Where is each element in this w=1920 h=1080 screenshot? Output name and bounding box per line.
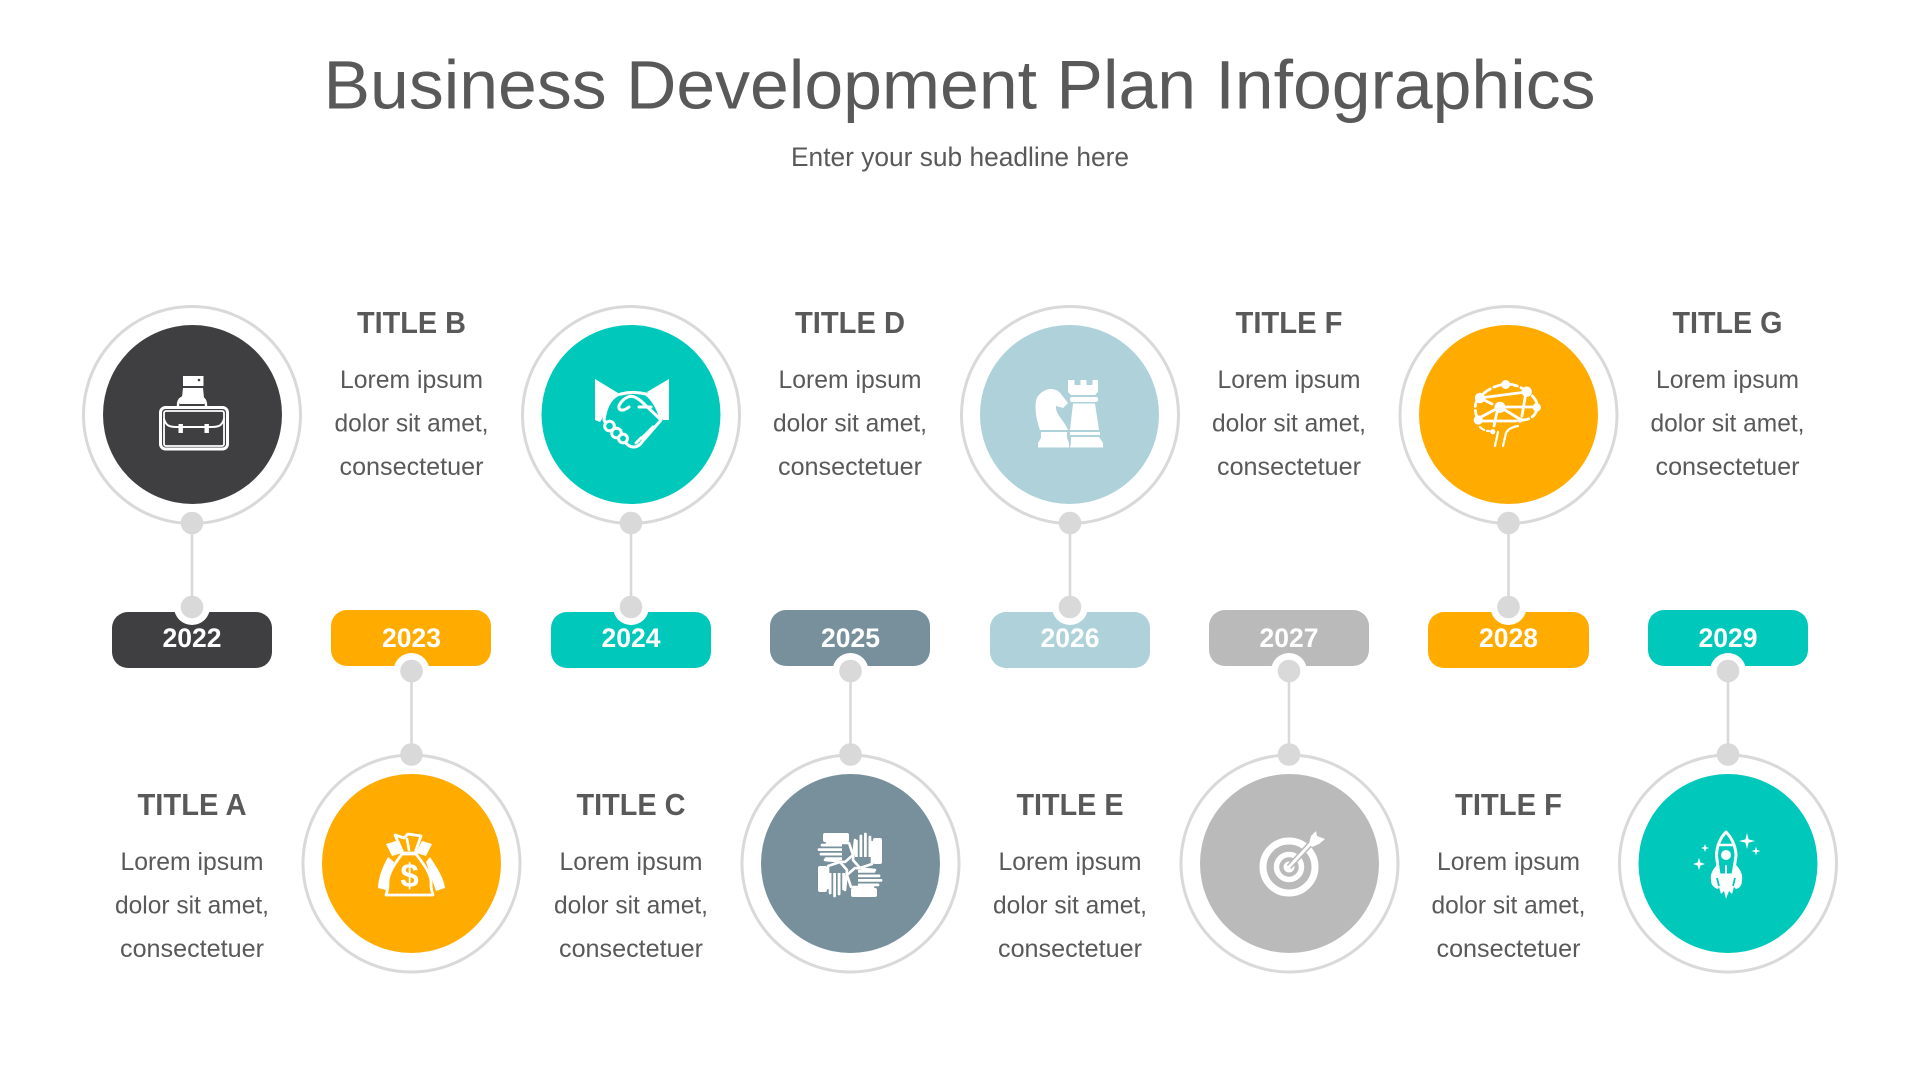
year 2023: 2023 (382, 623, 441, 653)
text block: title E (993, 787, 1147, 963)
dot top 2028 (1497, 512, 1520, 534)
text block: title D: consectetuer (778, 453, 922, 481)
connector 2029 (1727, 671, 1729, 754)
text block: title G: Lorem ipsum (1656, 366, 1799, 394)
pill 2023 (331, 610, 491, 666)
dot top 2029 (1717, 660, 1739, 682)
text block: title A: consectetuer (120, 935, 264, 963)
pill 2022 (112, 612, 272, 668)
connector 2022 (191, 523, 193, 607)
text block: title C: dolor sit amet, (554, 892, 708, 920)
icon: chess knight and rook (1036, 380, 1103, 448)
pill notch 2022 (174, 589, 210, 625)
year 2025: 2025 (821, 623, 880, 653)
connector 2027 (1288, 671, 1290, 754)
connector 2026 (1069, 523, 1071, 607)
step 2026: title E (962, 305, 1366, 668)
dot bottom 2027 (1278, 743, 1300, 766)
text block: title G (1650, 305, 1804, 481)
text block: title C: consectetuer (559, 935, 703, 963)
pill 2027 (1209, 610, 1369, 666)
text block: title B: dolor sit amet, (334, 410, 488, 438)
dot top 2027 (1278, 660, 1300, 682)
text block: title F: Lorem ipsum (1218, 366, 1360, 394)
pill 2025 (770, 610, 930, 666)
text block: title G: TITLE G (1672, 305, 1782, 340)
step 2029: title F (second) (1432, 610, 1836, 972)
pill 2029 (1648, 610, 1808, 666)
text block: title F second: TITLE F (1455, 787, 1562, 822)
circle 2023 (303, 755, 520, 972)
pill 2024 (551, 612, 711, 668)
text block: title E: consectetuer (998, 935, 1142, 963)
circle 2025 (742, 755, 959, 972)
connector 2025 (849, 671, 852, 754)
text block: title F second (1432, 787, 1586, 963)
dollar sign: $ (400, 857, 419, 894)
text block: title B (334, 305, 488, 481)
pill notch 2024 (613, 589, 649, 625)
connector 2023 (410, 671, 413, 754)
year 2027: 2027 (1260, 623, 1318, 653)
text block: title C (554, 787, 708, 963)
dot bottom 2022 (181, 596, 203, 618)
text block: title D: TITLE D (795, 305, 905, 340)
pill notch 2026 (1052, 589, 1088, 625)
circle 2029 (1620, 755, 1836, 972)
circle 2022 (84, 306, 300, 524)
text block: title F second: dolor sit amet, (1432, 892, 1586, 920)
text block: title F: dolor sit amet, (1212, 410, 1366, 438)
text block: title D (773, 305, 927, 481)
text block: title E: Lorem ipsum (998, 848, 1142, 876)
text block: title A (115, 787, 269, 963)
text block: title G: consectetuer (1656, 453, 1800, 481)
text block: title F: consectetuer (1217, 453, 1361, 481)
dot bottom 2026 (1059, 596, 1081, 618)
icon: brain network (1474, 380, 1541, 446)
dot top 2024 (620, 512, 642, 534)
year 2028: 2028 (1479, 623, 1538, 653)
text block: title C: Lorem ipsum (560, 848, 702, 876)
step 2025: title D (554, 610, 959, 972)
text block: title B: TITLE B (357, 305, 466, 340)
connector 2024 (630, 523, 632, 607)
dot top 2026 (1059, 512, 1081, 534)
text block: title E: dolor sit amet, (993, 892, 1147, 920)
icon: target with arrow (1263, 831, 1325, 893)
text block: title B: consectetuer (340, 453, 484, 481)
year 2024: 2024 (602, 623, 660, 653)
icon: money bag (378, 834, 445, 895)
pill notch 2025 (832, 653, 868, 689)
title: Business Development Plan Infographics (324, 46, 1596, 124)
icon: briefcase in hand (160, 376, 228, 449)
text block: title A: Lorem ipsum (120, 848, 264, 876)
text block: title F second: Lorem ipsum (1437, 848, 1580, 876)
dot bottom 2023 (400, 743, 423, 766)
text block: title D: Lorem ipsum (778, 366, 922, 394)
pill 2028 (1428, 612, 1589, 668)
circle 2027 (1181, 755, 1398, 972)
pill 2026 (990, 612, 1150, 668)
text block: title C: TITLE C (576, 787, 686, 822)
dot top 2022 (181, 512, 203, 534)
text block: title A: TITLE A (138, 787, 246, 822)
text block: title E: TITLE E (1016, 787, 1124, 822)
text block: title A: dolor sit amet, (115, 892, 269, 920)
step 2028: title G (1400, 305, 1804, 668)
pill notch 2028 (1490, 589, 1526, 625)
text block: title F (1212, 305, 1366, 481)
pill notch 2023 (394, 653, 430, 689)
step 2024: title C (522, 305, 927, 668)
circle 2028 (1400, 306, 1617, 524)
icon: handshake (595, 379, 669, 447)
icon: rocket with stars (1693, 832, 1760, 899)
dot bottom 2024 (620, 596, 642, 618)
step 2027: title F (993, 610, 1398, 972)
dot bottom 2028 (1497, 596, 1520, 618)
subtitle: Enter your sub headline here (791, 142, 1129, 172)
text block: title D: dolor sit amet, (773, 410, 927, 438)
dot top 2025 (839, 660, 862, 682)
year 2026: 2026 (1040, 623, 1100, 653)
year 2022: 2022 (162, 623, 222, 653)
dot top 2023 (400, 660, 423, 682)
year 2029: 2029 (1698, 623, 1758, 653)
dot bottom 2025 (839, 743, 862, 766)
text block: title B: Lorem ipsum (340, 366, 483, 394)
icon: four hands (818, 833, 882, 897)
text block: title G: dolor sit amet, (1650, 410, 1804, 438)
pill notch 2029 (1710, 653, 1746, 689)
pill notch 2027 (1271, 653, 1307, 689)
connector 2028 (1507, 523, 1510, 607)
circle 2026 (962, 306, 1178, 524)
circle 2024 (522, 306, 740, 524)
dot bottom 2029 (1717, 743, 1739, 766)
step 2023: title B (115, 610, 520, 972)
text block: title F second: consectetuer (1436, 935, 1580, 963)
step 2022: title A (84, 305, 488, 668)
text block: title F: TITLE F (1236, 305, 1342, 340)
